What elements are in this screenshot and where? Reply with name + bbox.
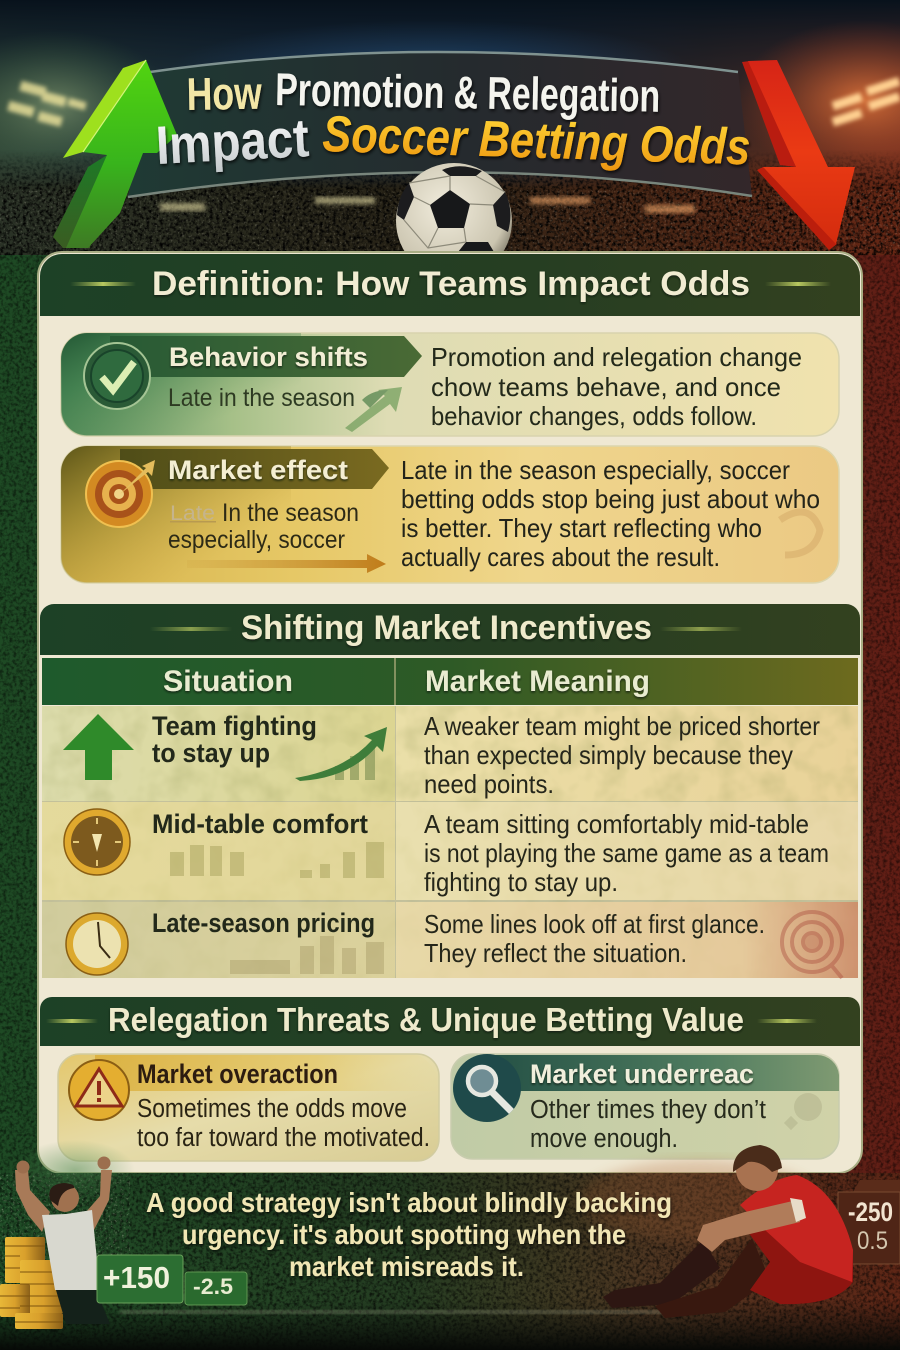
table row: mid-table comfort: A team sitting comfortably mid-table [424,809,809,839]
icon: check badge [84,343,150,409]
row: behavior shifts: Behavior shifts [169,342,368,372]
text: late in the season: Late in the season especially, soccer [401,455,790,485]
text: promotion and relegation: behavior changes, odds follow. [431,401,757,431]
icon: gold clock [64,809,130,875]
table row: team fighting: need points. [424,769,554,799]
strategy message: market misreads it. [289,1251,524,1282]
section heading: shifting market incentives [40,604,860,655]
card: market overaction: Market overaction [137,1059,338,1089]
title line 2: Impact [154,108,310,176]
section heading: relegation threats: Relegation Threats & Unique Betting Value [108,1001,744,1038]
table header: Situation [163,665,293,698]
row: behavior shifts: Late in the season [168,384,355,412]
main panel [38,252,862,1173]
table row: late-season pricing [42,902,858,978]
table row: team fighting: Team fighting [152,711,317,741]
icon: warning [69,1060,129,1120]
icon: rising arrows [345,387,402,432]
title [154,63,751,176]
title line 1: How [186,67,262,120]
table row: team fighting: A weaker team might be priced shorter [424,711,820,741]
table row: mid-table comfort [42,802,858,900]
section heading: shifting market incentives: Shifting Market Incentives [241,609,652,647]
far leg and boot [603,1240,720,1308]
chart: rising bars [295,727,387,781]
table row: mid-table comfort: is not playing the same game as a team [424,838,829,868]
odds box: -250: 0.5 [857,1227,888,1255]
table row: mid-table comfort: fighting to stay up. [424,867,618,897]
icon: magnifier [453,1054,521,1122]
figure: celebrating man [15,1156,112,1324]
chart: faint bars [170,842,384,878]
icon: green up arrow [53,60,177,248]
row: behavior shifts [61,333,839,436]
icon: soccer ball [396,163,512,251]
odds box: -2.5: -2.5 [193,1274,233,1299]
title line 1 [186,63,661,122]
section heading: definition: Definition: How Teams Impact Odds [152,265,750,303]
head [736,1149,778,1191]
title line 2 [154,105,751,176]
row: market effect: Late [170,502,215,525]
card: market overaction: Sometimes the odds move [137,1095,407,1123]
shirt [740,1175,853,1282]
table row: late-season pricing: Late-season pricing [152,908,375,938]
text: promotion and relegation [431,342,802,431]
table row: late-season pricing: Some lines look off at first glance. [424,909,765,939]
figure: dejected player [603,1145,853,1318]
card: market underreaction: Market underreac [530,1059,754,1089]
shorts [748,1230,853,1304]
row: market effect: In the season [222,499,359,527]
table row: team fighting: to stay up [152,738,270,768]
table row: team fighting [42,706,858,978]
card: market underreaction: move enough. [530,1125,678,1153]
section heading: definition [40,254,860,316]
odds box: -2.5 [185,1272,247,1305]
text: late in the season: actually cares about the result. [401,542,720,572]
text: promotion and relegation: chow teams behave, and once [431,372,781,402]
table header [42,658,858,705]
icon: green up arrow [63,714,134,780]
card: market overaction [58,1054,439,1161]
card: market underreaction: Other times they don’t [530,1096,766,1124]
icon: gold coins [0,1237,67,1329]
table header: Market Meaning [425,665,650,698]
row: market effect: especially, soccer [168,526,345,554]
row: market effect: Market effect [168,455,348,485]
icon: faint swirl watermark [780,512,820,555]
arrow: market effect [187,554,386,573]
card: market overaction: too far toward the motivated. [137,1124,430,1152]
icon: faint target magnifier [782,912,842,978]
table row: late-season pricing: They reflect the situation. [424,938,687,968]
icon: faint balloon [784,1093,822,1130]
odds box: +150 [97,1255,183,1303]
table row: mid-table comfort: Mid-table comfort [152,809,368,839]
icon: target [86,460,155,527]
text: late in the season: is better. They start reflecting who [401,513,762,543]
text: late in the season [401,455,820,572]
strategy message: urgency. it's about spotting when the [182,1219,626,1250]
icon: red down arrow [742,60,855,250]
near leg and boot [655,1238,770,1318]
strategy message: A good strategy isn't about blindly backing [146,1187,672,1218]
section heading: relegation threats [40,997,860,1046]
chart: faint bars [230,936,384,974]
footer: strategy scene [0,1140,900,1350]
icon: clock [66,913,128,975]
text: late in the season: betting odds stop being just about who [401,484,820,514]
title line 1: Promotion & Relegation [275,63,661,122]
row: market effect [61,446,839,583]
odds box: +150: +150 [103,1260,170,1295]
odds box: -250 [838,1180,900,1264]
arm [697,1200,800,1252]
title line 2: Soccer Betting Odds [322,105,751,175]
text: promotion and relegation: Promotion and relegation change [431,342,802,372]
card: market underreaction [451,1054,839,1159]
table row: team fighting: than expected simply because they [424,740,793,770]
strategy message [146,1187,672,1282]
title banner [128,52,752,197]
table: market incentives [42,658,858,978]
